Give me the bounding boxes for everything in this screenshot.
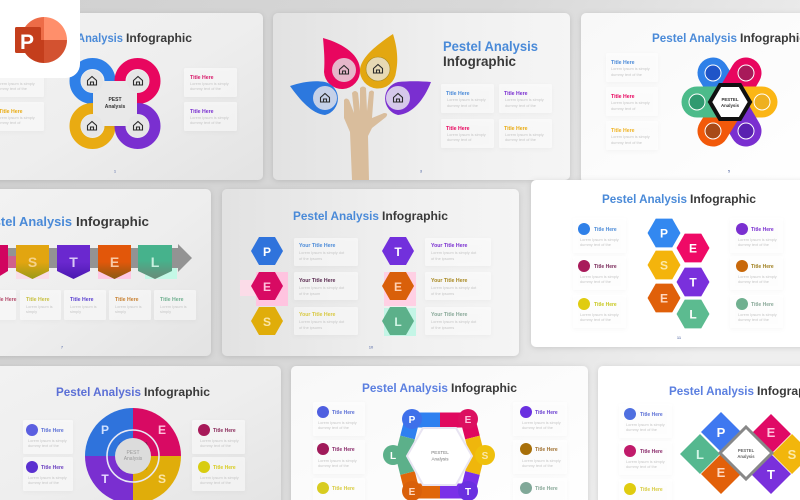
card: blue xyxy=(441,84,494,113)
page number: 5 xyxy=(728,168,731,174)
diamond diagram: T xyxy=(767,467,775,482)
PESTEL loop diagram: Analysis xyxy=(721,103,740,108)
PESTEL loop diagram xyxy=(689,65,770,139)
slide 8: hexagon ring xyxy=(291,366,588,500)
slide 2 title: Infographic xyxy=(443,54,516,69)
slide 8 title: Pestel Analysis xyxy=(362,383,448,395)
card: magenta xyxy=(619,441,672,475)
card: purple: Title Here xyxy=(535,410,558,416)
card: L xyxy=(425,307,491,335)
card: yellow: Title Here xyxy=(213,465,236,471)
card: E: Lorem Ipsum is xyxy=(115,304,142,309)
slide 1 title: Analysis xyxy=(77,33,123,45)
slide 2: hand with petals xyxy=(273,13,570,180)
diamond diagram: S xyxy=(788,447,797,462)
card: L: Lorem Ipsum is xyxy=(160,304,187,309)
slide 2 title xyxy=(443,39,538,69)
hexagon E: E xyxy=(263,280,271,294)
card: yellow: Lorem Ipsum is simply xyxy=(611,134,650,139)
card: L: Your Title Here xyxy=(431,312,468,318)
card: yellow: Title Here xyxy=(640,487,663,493)
card: magenta: Title Here xyxy=(640,449,663,455)
card: magenta: Lorem Ipsum is simply xyxy=(447,132,486,137)
honeycomb hexagons: T xyxy=(689,276,697,290)
pie diagram: S xyxy=(158,472,166,486)
petal: blue xyxy=(290,81,338,115)
card: yellow: dummy text of the xyxy=(580,317,611,322)
card: left bottom xyxy=(0,102,44,131)
card: magenta: Title Here xyxy=(332,447,355,453)
shield: T xyxy=(57,245,90,279)
hexagon P: P xyxy=(263,245,271,259)
slide 6 title xyxy=(602,194,757,206)
card: partial xyxy=(0,290,17,320)
card: L: Lorem Ipsum is simply dot xyxy=(431,319,477,324)
card: magenta: dummy text of the xyxy=(580,279,611,284)
card: blue xyxy=(313,402,365,436)
PEST four ring diagram: Analysis xyxy=(105,104,125,110)
card: blue: Lorem Ipsum is simply xyxy=(447,97,486,102)
card: orange: dummy text of the xyxy=(522,463,553,468)
slide 5 title xyxy=(293,211,449,223)
slide 4 background xyxy=(0,189,211,356)
card: T: Lorem Ipsum is simply dot xyxy=(431,250,477,255)
PEST four ring diagram: PEST xyxy=(108,97,122,103)
card: S: simply xyxy=(26,309,37,314)
honeycomb hexagons: E xyxy=(689,242,697,256)
card: blue xyxy=(619,404,672,438)
card: blue: dummy text of the xyxy=(626,427,657,432)
hexagon T xyxy=(382,237,414,265)
slide 5 title: Pestel Analysis xyxy=(293,211,379,223)
card: purple xyxy=(23,457,73,491)
card: green: Title Here xyxy=(535,486,558,492)
card: blue: Lorem Ipsum is simply xyxy=(28,438,67,443)
slide 6 background xyxy=(531,180,800,347)
card: E: Lorem Ipsum is simply dot xyxy=(299,285,345,290)
slide 3 title xyxy=(652,33,800,45)
hexagon ring diagram: S xyxy=(482,451,489,462)
card: E: Title Here xyxy=(115,297,139,303)
card: magenta: Lorem Ipsum is simply xyxy=(611,100,650,105)
card: orange: dummy text of the xyxy=(738,279,769,284)
card: magenta: Lorem Ipsum is simply xyxy=(580,274,619,279)
card: T: Your Title Here xyxy=(431,243,468,249)
card: L: Title Here xyxy=(160,297,184,303)
card: S: Lorem Ipsum is xyxy=(26,304,53,309)
card: magenta: Title Here xyxy=(446,126,470,132)
petal: magenta xyxy=(323,38,360,89)
slide 7 title xyxy=(56,387,211,399)
card: yellow: Title Here xyxy=(332,486,355,492)
slide 8 title: Infographic xyxy=(451,383,518,395)
card: S xyxy=(294,307,358,335)
card: blue: Lorem Ipsum is simply xyxy=(318,420,357,425)
card: magenta xyxy=(192,420,245,454)
slide 1 title: Infographic xyxy=(126,33,193,45)
slide 2 background xyxy=(273,13,570,180)
card: yellow: dummy text of the xyxy=(611,140,642,145)
slide 5: hexagon list xyxy=(222,189,519,356)
shield: S: S xyxy=(28,254,37,270)
card: yellow: Title Here xyxy=(611,128,635,134)
card: E: Your Title Here xyxy=(431,278,468,284)
pie diagram: E xyxy=(158,423,166,437)
hexagon L xyxy=(382,307,414,335)
card: T: of the ipsums xyxy=(431,256,454,261)
page number: 7 xyxy=(61,344,64,350)
card: E: simply xyxy=(115,309,126,314)
card: P xyxy=(294,238,358,266)
card: T: simply xyxy=(70,309,81,314)
card: orange xyxy=(730,256,783,290)
honeycomb hexagons xyxy=(648,219,709,328)
card: purple xyxy=(499,84,552,113)
card: green xyxy=(513,478,567,500)
card: E: of the ipsums xyxy=(431,291,454,296)
card: magenta: dummy text of the xyxy=(200,443,231,448)
card: E xyxy=(294,272,358,300)
shield: E xyxy=(98,245,131,279)
diamond diagram: P xyxy=(717,425,726,440)
card: blue: dummy text of the xyxy=(611,72,642,77)
page number: 11 xyxy=(677,335,682,340)
card: yellow: Lorem Ipsum is simply xyxy=(580,312,619,317)
hexagon ring diagram: Analysis xyxy=(431,456,449,462)
card: E xyxy=(425,272,491,300)
hexagon ring diagram: P xyxy=(409,415,416,426)
card: purple: dummy text of the xyxy=(505,103,536,108)
card: yellow xyxy=(499,119,552,148)
hexagon ring diagram: L xyxy=(390,451,396,462)
card: blue: Title Here xyxy=(611,60,635,66)
card: blue: Lorem Ipsum is simply xyxy=(611,66,650,71)
slide 7: PEST pie xyxy=(0,366,281,500)
card: L: simply xyxy=(160,309,171,314)
card: P: Lorem Ipsum is simply dot xyxy=(299,250,345,255)
slide 6: hexagon honeycomb xyxy=(531,180,800,347)
slide 7 background xyxy=(0,366,281,500)
card: purple: Title Here xyxy=(41,465,64,471)
card: blue xyxy=(606,53,658,82)
card: S: of the ipsums xyxy=(299,325,322,330)
page number: 3 xyxy=(420,168,423,174)
PowerPoint logo badge xyxy=(0,0,80,78)
card: orange xyxy=(513,440,567,474)
slide 8 background xyxy=(291,366,588,500)
card: blue: Title Here xyxy=(41,428,64,434)
diamond diagram: E xyxy=(717,465,726,480)
card: yellow xyxy=(619,479,672,500)
card: right top: dummy text of the xyxy=(190,86,221,91)
card: yellow: Title Here xyxy=(504,126,528,132)
card: magenta: Title Here xyxy=(213,428,236,434)
card: right bottom xyxy=(184,102,237,131)
hexagon L: L xyxy=(394,315,402,329)
card: yellow xyxy=(606,121,658,150)
card: blue xyxy=(23,420,73,454)
card: L: of the ipsums xyxy=(431,325,454,330)
card: yellow xyxy=(573,295,626,328)
card: P: Your Title Here xyxy=(299,243,336,249)
card: green: dummy text of the xyxy=(738,317,769,322)
card: purple: dummy text of the xyxy=(522,425,553,430)
diamond diagram xyxy=(680,412,800,494)
card: E xyxy=(109,290,151,320)
slide 1 title xyxy=(77,33,193,45)
gray arrow xyxy=(0,244,192,272)
hexagon ring diagram: E xyxy=(465,415,472,426)
shield: S xyxy=(16,245,49,279)
hexagon E xyxy=(382,272,414,300)
card: purple xyxy=(730,218,783,253)
card: blue: Title Here xyxy=(640,412,663,418)
diamond diagram: Analysis xyxy=(737,454,755,459)
card: purple: Lorem Ipsum is simply xyxy=(28,475,67,480)
card: S xyxy=(20,290,61,320)
card: magenta: dummy text of xyxy=(447,137,472,142)
card: magenta: dummy text of the xyxy=(626,464,657,469)
card: S: Your Title Here xyxy=(299,312,336,318)
slide 9 background xyxy=(598,366,800,500)
hexagon ring diagram: PESTEL xyxy=(431,450,449,455)
card: orange: Title Here xyxy=(751,264,774,270)
card: E: Your Title Here xyxy=(299,278,336,284)
pie diagram: PEST xyxy=(126,450,140,456)
card: magenta: Title Here xyxy=(611,94,635,100)
card: green xyxy=(730,295,783,328)
slide 5 background xyxy=(222,189,519,356)
card: purple: Title Here xyxy=(751,227,774,233)
pie diagram xyxy=(85,408,181,500)
card: right bottom: Title Here xyxy=(190,109,214,115)
shield: L xyxy=(138,245,172,279)
diamond diagram: E xyxy=(767,425,776,440)
slide 1 background xyxy=(0,13,263,180)
slide 4 title: Infographic xyxy=(76,214,149,229)
card: left top xyxy=(0,68,44,97)
card: magenta: Lorem Ipsum is simply xyxy=(200,438,239,443)
slide 8 title xyxy=(362,383,518,395)
card: S: Title Here xyxy=(26,297,50,303)
pie diagram: T xyxy=(101,472,109,486)
honeycomb hexagons: E xyxy=(660,292,668,306)
hexagon E: E xyxy=(394,280,402,294)
card: purple: Title Here xyxy=(504,91,528,97)
slide 1: PEST circles xyxy=(0,13,263,180)
card: orange: Lorem Ipsum is simply xyxy=(738,274,777,279)
card: blue: Title Here xyxy=(446,91,470,97)
card: magenta xyxy=(441,119,494,148)
card: right top: Title Here xyxy=(190,75,214,81)
hexagon P xyxy=(251,237,283,265)
slide 7 title: Infographic xyxy=(144,387,211,399)
hexagon ring diagram: E xyxy=(409,487,416,498)
card: blue: Lorem Ipsum is simply xyxy=(580,237,619,242)
card: magenta: Title Here xyxy=(594,264,617,270)
card: E: Lorem Ipsum is simply dot xyxy=(431,285,477,290)
slide 9: diamonds xyxy=(598,366,800,500)
card: yellow: Lorem Ipsum is simply xyxy=(505,132,544,137)
card: right bottom: dummy text of the xyxy=(190,120,221,125)
hexagon ring diagram: T xyxy=(465,487,471,498)
card: yellow: Title Here xyxy=(594,302,617,308)
slide 9 title xyxy=(669,386,800,398)
card: magenta xyxy=(313,440,365,474)
PEST four ring diagram xyxy=(75,64,155,144)
page number: 1 xyxy=(114,168,117,174)
slide 5 title: Infographic xyxy=(382,211,449,223)
slide 7 title: Pestel Analysis xyxy=(56,387,141,399)
slide 2 title: Pestel Analysis xyxy=(443,39,538,54)
card: S: Lorem Ipsum is simply dot xyxy=(299,319,345,324)
card: T: Lorem Ipsum is xyxy=(70,304,97,309)
hexagon E xyxy=(251,272,283,300)
shield: T: T xyxy=(69,254,78,270)
slide 4 title xyxy=(0,214,149,229)
card: magenta xyxy=(606,87,658,116)
card: blue: dummy text of the xyxy=(580,242,611,247)
diamond diagram: PESTEL xyxy=(738,448,755,453)
card: P: of the ipsums xyxy=(299,256,322,261)
card: magenta: dummy text of xyxy=(611,106,636,111)
PESTEL loop diagram: PESTEL xyxy=(721,97,739,102)
card: right top: Lorem Ipsum is simply xyxy=(190,81,229,86)
card: purple: dummy text of the xyxy=(28,480,59,485)
hexagon ring diagram xyxy=(383,409,495,500)
card: purple xyxy=(513,402,567,436)
pie diagram: P xyxy=(101,423,109,437)
shield: L: L xyxy=(151,254,160,270)
slide 3: PESTEL loops xyxy=(581,13,800,183)
card: orange: Lorem Ipsum is simply xyxy=(522,458,561,463)
card: T: Title Here xyxy=(70,297,94,303)
shield: P/E magenta xyxy=(0,245,8,279)
slide 6 title: Pestel Analysis xyxy=(602,194,687,206)
honeycomb hexagons: P xyxy=(660,226,668,240)
hand illustration xyxy=(344,86,387,180)
card: yellow: dummy text of the xyxy=(200,480,231,485)
card: right bottom: Lorem Ipsum is simply xyxy=(190,115,229,120)
slide 3 background xyxy=(581,13,800,183)
card: yellow: dummy text of the xyxy=(505,137,536,142)
slide 9 title: Pestel Analysis xyxy=(669,386,754,398)
card: yellow xyxy=(192,457,245,491)
card: purple: Lorem Ipsum is simply xyxy=(505,97,544,102)
petal: yellow xyxy=(360,34,397,89)
card: yellow: Lorem Ipsum is simply xyxy=(200,475,239,480)
diamond diagram: L xyxy=(696,447,704,462)
card: blue: dummy text of the xyxy=(318,425,349,430)
card: T xyxy=(64,290,106,320)
card: magenta: Lorem Ipsum is simply xyxy=(626,459,665,464)
card: blue: Title Here xyxy=(332,410,355,416)
card: L xyxy=(154,290,196,320)
card: T xyxy=(425,238,491,266)
honeycomb hexagons: S xyxy=(660,258,668,272)
shield: E: E xyxy=(110,254,119,270)
slide 4: arrow banners xyxy=(0,189,211,356)
card: purple: dummy text of the xyxy=(738,242,769,247)
card: purple: Lorem Ipsum is simply xyxy=(522,420,561,425)
icon: PowerPoint: P xyxy=(20,31,34,54)
slide 3 title: Pestel Analysis xyxy=(652,33,737,45)
card: blue: dummy text of the xyxy=(447,103,478,108)
card: orange: Title Here xyxy=(535,447,558,453)
card: blue: dummy text of the xyxy=(28,443,59,448)
card: magenta: Lorem Ipsum is simply xyxy=(318,458,357,463)
card: magenta: dummy text of the xyxy=(318,463,349,468)
card: blue: Lorem Ipsum is simply xyxy=(626,422,665,427)
petal: purple xyxy=(385,81,431,115)
honeycomb hexagons: L xyxy=(689,308,697,322)
card: right top xyxy=(184,68,237,97)
card: blue: Title Here xyxy=(594,227,617,233)
hexagon T: T xyxy=(394,245,402,259)
card: yellow xyxy=(313,478,365,500)
card: purple: Lorem Ipsum is simply xyxy=(738,237,777,242)
page number: 10 xyxy=(369,344,374,350)
hexagon S xyxy=(251,307,283,335)
card: E: of the ipsum xyxy=(299,291,320,296)
card: blue xyxy=(573,218,626,253)
hexagon S: S xyxy=(263,315,271,329)
slide 6 title: Infographic xyxy=(690,194,757,206)
card: green: Title Here xyxy=(751,302,774,308)
card: magenta xyxy=(573,256,626,290)
card: green: Lorem Ipsum is simply xyxy=(738,312,777,317)
pie diagram: Analysis xyxy=(124,456,143,462)
